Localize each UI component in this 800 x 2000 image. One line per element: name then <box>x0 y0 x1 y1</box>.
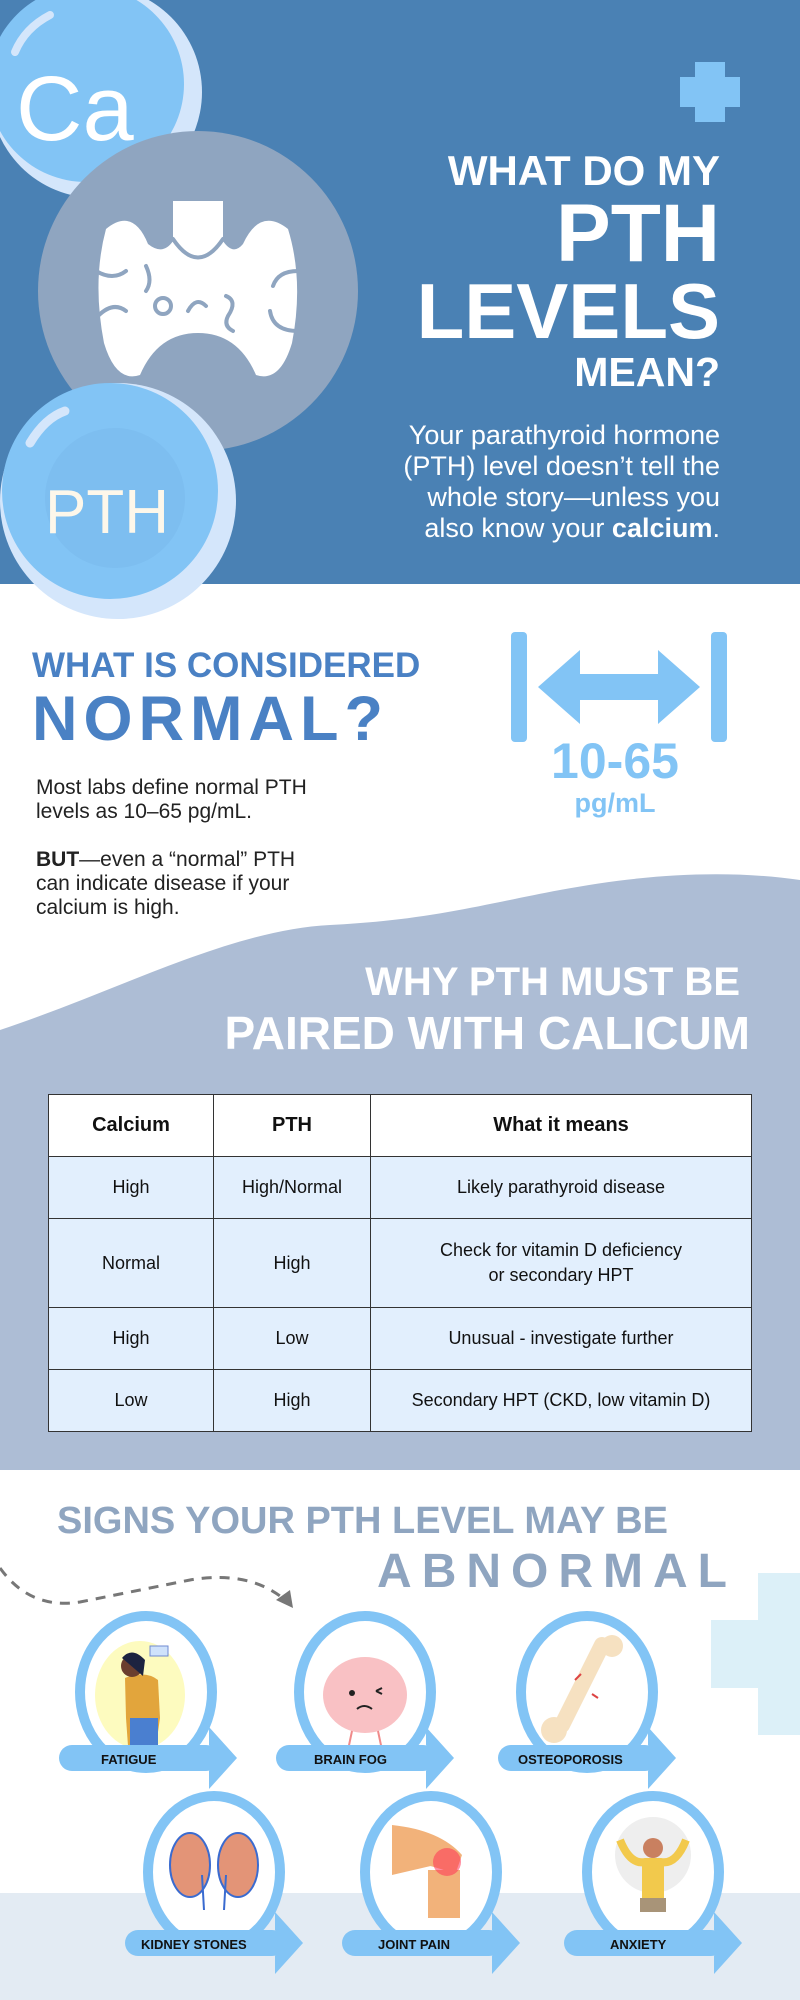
icon: PTH bubble <box>0 383 236 619</box>
intro text: also know your calcium. <box>424 513 720 543</box>
sign: fatigue <box>59 1616 237 1789</box>
sign: anxiety <box>564 1796 742 1974</box>
table: High <box>273 1252 311 1272</box>
table: Unusual - investigate further <box>448 1328 674 1348</box>
icon: Ca bubble <box>0 0 202 195</box>
normal text: calcium is high. <box>36 896 180 919</box>
sign: anxiety: ANXIETY <box>610 1937 667 1952</box>
table: High <box>273 1390 311 1410</box>
table <box>48 1094 752 1432</box>
intro text <box>403 420 720 543</box>
normal text: Most labs define normal PTH <box>36 776 307 799</box>
sign: joint pain: JOINT PAIN <box>378 1937 450 1952</box>
intro text: (PTH) level doesn’t tell the <box>403 451 720 481</box>
intro text: Your parathyroid hormone <box>409 420 720 450</box>
icon: thyroid circle <box>38 131 358 449</box>
normal text: BUT—even a “normal” PTH <box>36 848 295 871</box>
sign: kidney stones <box>125 1796 303 1974</box>
table: Normal <box>102 1252 160 1272</box>
sign: osteoporosis <box>498 1616 676 1789</box>
sign: fatigue: FATIGUE <box>101 1752 157 1767</box>
heading: signs: ABNORMAL <box>377 1545 737 1598</box>
icon: range arrow <box>511 632 727 742</box>
sign icons <box>59 1611 742 1974</box>
title: MEAN? <box>574 349 720 395</box>
table: Check for vitamin D deficiency <box>440 1240 682 1260</box>
table: Low <box>114 1390 148 1410</box>
arrow: dashed <box>0 1567 293 1608</box>
heading: signs: SIGNS YOUR PTH LEVEL MAY BE <box>57 1500 668 1542</box>
heading: signs <box>57 1500 737 1598</box>
icon: PTH bubble: PTH <box>45 478 169 547</box>
table: PTH <box>272 1114 312 1136</box>
heading: why PTH must be paired <box>224 960 750 1059</box>
table: Calcium <box>92 1114 170 1136</box>
table: High <box>112 1177 150 1197</box>
table: Secondary HPT (CKD, low vitamin D) <box>412 1390 710 1410</box>
title <box>417 147 720 395</box>
icon: Ca bubble: Ca <box>16 58 134 160</box>
range value <box>551 733 679 818</box>
table: High/Normal <box>242 1177 342 1197</box>
heading: why PTH must be paired: WHY PTH MUST BE <box>365 960 740 1004</box>
title: LEVELS <box>417 267 720 355</box>
sign: brain fog <box>276 1616 454 1789</box>
table: or secondary HPT <box>488 1265 634 1285</box>
title: PTH <box>556 188 720 279</box>
heading: what is considered normal <box>32 646 420 754</box>
sign: kidney stones: KIDNEY STONES <box>141 1937 247 1952</box>
range value: pg/mL <box>574 788 656 818</box>
sign: joint pain <box>342 1796 520 1974</box>
sign: osteoporosis: OSTEOPOROSIS <box>518 1752 623 1767</box>
title: WHAT DO MY <box>448 147 720 194</box>
heading: what is considered normal: WHAT IS CONSIDERED <box>32 646 420 685</box>
normal text <box>36 776 307 919</box>
table: Low <box>275 1328 309 1348</box>
table: What it means <box>493 1114 629 1136</box>
intro text: whole story—unless you <box>427 482 720 512</box>
sign: brain fog: BRAIN FOG <box>314 1752 387 1767</box>
normal text: levels as 10–65 pg/mL. <box>36 800 252 823</box>
table: Likely parathyroid disease <box>457 1177 665 1197</box>
icon: plus <box>680 62 740 122</box>
range value: 10-65 <box>551 733 679 789</box>
heading: what is considered normal: NORMAL? <box>32 684 389 754</box>
table: High <box>112 1328 150 1348</box>
normal text: can indicate disease if your <box>36 872 289 895</box>
heading: why PTH must be paired: PAIRED WITH CALICUM <box>224 1007 750 1059</box>
